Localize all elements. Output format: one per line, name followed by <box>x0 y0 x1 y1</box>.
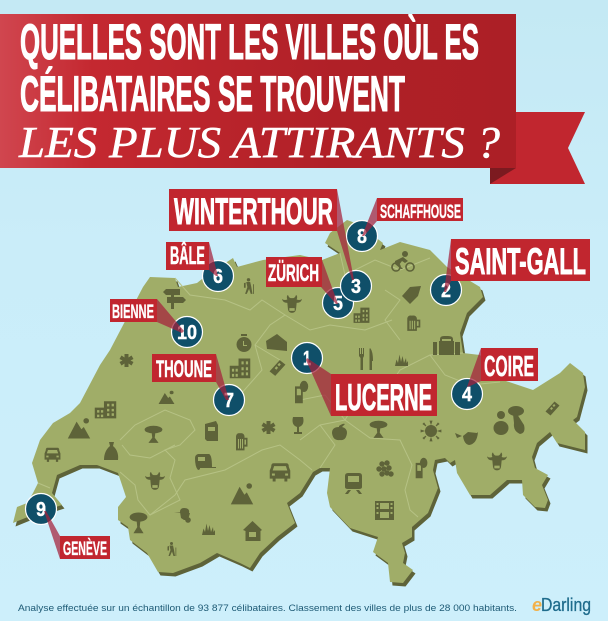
pin 4 <box>452 378 482 410</box>
icon: chocolate bar <box>546 402 560 416</box>
icon: signpost <box>163 289 186 309</box>
label: Schaffhouse <box>362 198 463 236</box>
icon: caravan <box>195 454 216 470</box>
pin 9 <box>26 494 56 524</box>
icon: bicycle <box>392 251 414 271</box>
icon: wine box <box>205 421 218 441</box>
label: Winterthour <box>169 189 354 280</box>
label: Genève <box>44 511 110 560</box>
icon: mountain <box>68 418 90 438</box>
label: Coire <box>467 348 538 387</box>
icon: grass <box>202 524 215 535</box>
icon: tree <box>144 426 162 443</box>
canton borders <box>38 253 500 517</box>
icon: car <box>270 463 290 482</box>
pin 6: 6 <box>213 266 223 288</box>
pin 8 <box>346 220 378 252</box>
pin 1: 1 <box>303 348 311 370</box>
icon: wheelbarrow <box>174 508 191 523</box>
icon: medical star <box>262 421 276 434</box>
banner tail <box>490 112 585 184</box>
icon: chocolate bar <box>270 360 286 376</box>
label: Bâle: BÂLE <box>170 240 205 270</box>
pin 2 <box>430 274 462 306</box>
pin 3: 3 <box>351 276 361 298</box>
title banner <box>0 14 585 184</box>
icon: beer mug <box>236 433 248 450</box>
icon: sun <box>421 421 441 441</box>
icon: buildings <box>354 308 370 323</box>
icon: fork and knife <box>359 348 373 370</box>
label: Bâle <box>166 240 218 276</box>
label: Zürich: ZÜRICH <box>268 260 319 287</box>
icon: cow head <box>145 472 165 490</box>
icon: car <box>44 448 60 462</box>
icon: house <box>243 521 262 541</box>
icon: tree <box>130 512 148 534</box>
pin 2: 2 <box>441 280 451 302</box>
label: Coire: COIRE <box>484 351 534 383</box>
icon: buildings <box>230 358 250 378</box>
pin 4: 4 <box>462 384 473 406</box>
icon: grapes <box>376 460 394 477</box>
map of Switzerland <box>13 220 588 586</box>
pin 5: 5 <box>333 293 343 315</box>
icon: cow head <box>282 295 302 313</box>
map land <box>13 220 585 583</box>
label: Zürich <box>266 257 338 304</box>
logo: eDarling: e <box>532 595 542 615</box>
pin 6 <box>202 260 234 292</box>
icon: cheese <box>266 334 287 351</box>
pin 3 <box>340 270 372 302</box>
icon: bird <box>455 432 478 445</box>
label: Thoune <box>152 354 229 400</box>
label: Bienne <box>110 299 184 333</box>
icon: train <box>345 473 362 494</box>
label: Genève: GENÈVE <box>63 538 107 560</box>
logo: eDarling: Darling <box>541 595 591 615</box>
label: Thoune: THOUNE <box>156 356 212 383</box>
label: Saint-Gall <box>444 239 590 292</box>
pin 1 <box>292 342 322 374</box>
icon: stopwatch <box>237 334 252 352</box>
pin 10: 10 <box>177 322 197 344</box>
pin 9: 9 <box>36 499 46 521</box>
label: Schaffhouse: SCHAFFHOUSE <box>380 202 461 223</box>
icon: apple <box>332 424 347 440</box>
banner fold <box>490 168 516 184</box>
label: Bienne: BIENNE <box>112 302 154 323</box>
icon: beer mug <box>407 316 420 331</box>
icon: drink <box>416 458 428 478</box>
map shadow <box>16 224 588 586</box>
label: Lucerne: LUCERNE <box>335 377 432 418</box>
icon: money bag <box>104 442 118 460</box>
icon: mountain small <box>158 390 174 404</box>
pin 8: 8 <box>357 226 367 248</box>
icon: hiker <box>244 278 254 294</box>
label: Lucerne <box>306 358 437 418</box>
icon: grass <box>395 355 408 366</box>
pin 10 <box>172 316 202 348</box>
pin 5 <box>322 288 354 318</box>
icon: cow head <box>487 452 507 470</box>
icon: suitcase <box>433 336 460 355</box>
icon: tree <box>370 420 388 438</box>
icon: cluster of trees <box>494 406 524 435</box>
icon: film strip <box>375 501 394 520</box>
icon: buildings <box>94 401 116 418</box>
icon: price tag <box>402 286 421 304</box>
icon: hiker <box>168 542 176 556</box>
banner body <box>0 14 516 168</box>
title line 3: LES PLUS ATTIRANTS ? <box>18 118 500 167</box>
footnote: Analyse effectuée sur un échantillon de 93 877 célibataires. Classement des villes de plus de 28 000 habitants. <box>18 603 517 614</box>
pin 7: 7 <box>224 390 234 412</box>
pin 7 <box>214 384 244 416</box>
icon: mountain <box>230 483 254 504</box>
icon: drink <box>295 380 308 404</box>
icon: medical star <box>120 354 134 367</box>
icon: wine glass <box>292 417 304 434</box>
label: Winterthour: WINTERTHOUR <box>174 191 333 232</box>
